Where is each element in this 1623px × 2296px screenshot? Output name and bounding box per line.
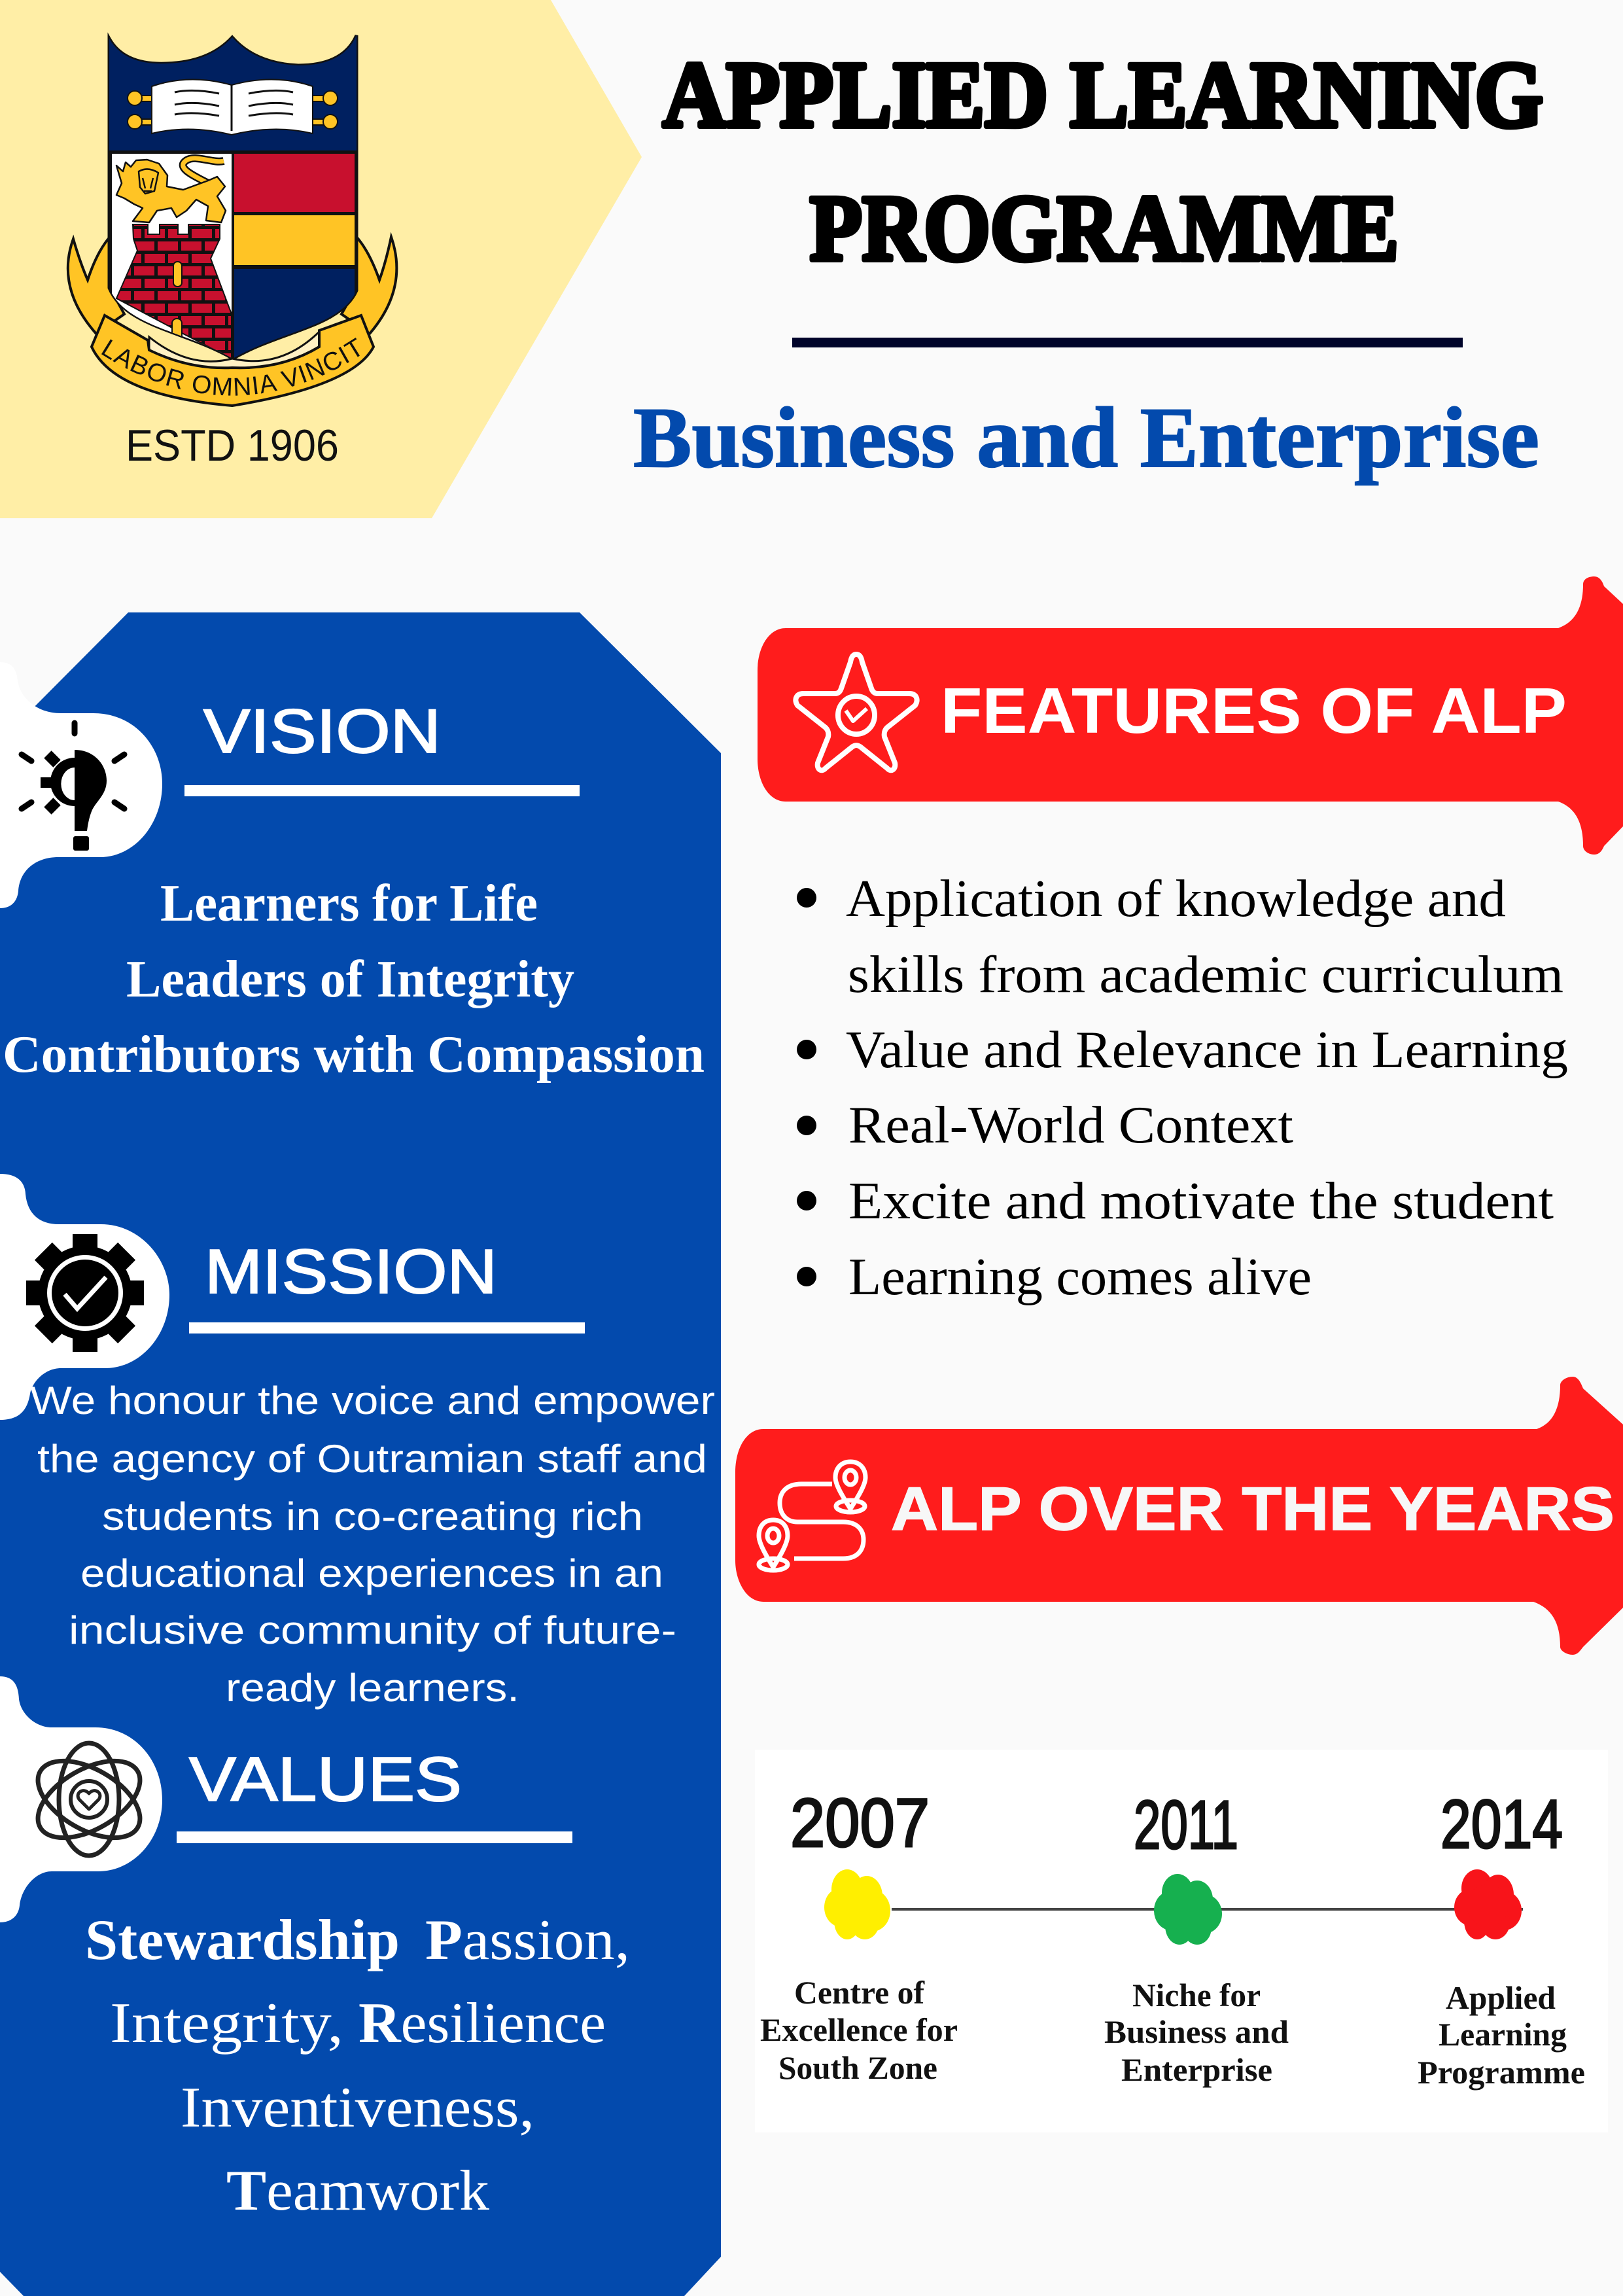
mission statement (30, 1379, 715, 1710)
values list (85, 1909, 630, 2223)
icon: school crest (67, 33, 398, 407)
icon: star with check (795, 654, 917, 770)
caption 2007: Excellence for (760, 2011, 958, 2048)
title: APPLIED LEARNING (663, 43, 1543, 147)
vision section (0, 706, 704, 1083)
caption 2011: Business and (1104, 2013, 1289, 2050)
vision underline (184, 785, 580, 796)
mission statement: students in co-creating rich (102, 1494, 643, 1538)
mission statement: educational experiences in an (80, 1551, 663, 1595)
crest lion (116, 158, 226, 222)
panel: timeline (755, 1750, 1608, 2132)
features list: Value and Relevance in Learning (846, 1021, 1568, 1079)
values list: Stewardship (85, 1909, 400, 1972)
title: PROGRAMME (810, 177, 1399, 281)
values list: Integrity, (110, 1992, 343, 2055)
banner: ALP over the years (735, 1377, 1623, 1655)
values section (0, 1676, 630, 2223)
crest shield (105, 26, 363, 370)
mission section (0, 1174, 715, 1710)
features list: Excite and motivate the student (848, 1173, 1554, 1230)
caption 2007: South Zone (778, 2049, 937, 2086)
features list: Application of knowledge and (846, 870, 1506, 928)
values list: Resilience (358, 1992, 606, 2055)
icon: atom with heart (0, 1676, 162, 1922)
features heading: FEATURES OF ALP (941, 675, 1567, 747)
icon: lightbulb with gear (0, 706, 162, 908)
mission heading: MISSION (205, 1237, 497, 1307)
timeline node 2011 (1104, 1787, 1289, 2088)
timeline node 2007 (760, 1785, 958, 2086)
subtitle: Business and Enterprise (633, 389, 1539, 486)
title divider (792, 338, 1463, 347)
vision heading: VISION (203, 697, 441, 766)
mission underline (189, 1322, 585, 1333)
vision statements (3, 875, 705, 1084)
crest open book (128, 79, 338, 135)
years heading: ALP OVER THE YEARS (891, 1474, 1614, 1543)
caption 2011: Enterprise (1121, 2051, 1272, 2088)
year label 2011: 2011 (1134, 1787, 1238, 1863)
timeline line (892, 1908, 1523, 1911)
logo caption: ESTD 1906 (126, 421, 339, 470)
panel: vision mission values (0, 612, 721, 2296)
crest motto scroll: LABOR OMNIA VINCIT (101, 338, 360, 396)
panel: header logo hexagon (0, 0, 642, 518)
caption 2014 (1418, 1979, 1585, 2091)
caption 2007 (760, 1974, 958, 2086)
caption 2014: Learning (1439, 2016, 1567, 2053)
mission statement: the agency of Outramian staff and (37, 1437, 707, 1481)
caption 2007: Centre of (794, 1974, 925, 2011)
mission statement: ready learners. (226, 1666, 519, 1710)
year label 2014: 2014 (1440, 1786, 1563, 1863)
vision statements: Contributors with Compassion (3, 1026, 705, 1084)
features list: Real-World Context (848, 1097, 1293, 1154)
mission statement: We honour the voice and empower (30, 1379, 715, 1422)
values list: Passion, (425, 1909, 630, 1972)
icon: gear with check (0, 1174, 169, 1420)
features list: Learning comes alive (848, 1248, 1312, 1306)
title (663, 43, 1543, 281)
features list (797, 870, 1568, 1306)
values list: Teamwork (226, 2159, 489, 2223)
caption 2014: Programme (1418, 2054, 1585, 2091)
mission statement: inclusive community of future- (69, 1608, 676, 1652)
banner: features of ALP (758, 576, 1623, 855)
timeline node 2014 (1418, 1786, 1585, 2091)
crest horns (68, 237, 396, 334)
values heading: VALUES (189, 1744, 462, 1814)
features list: skills from academic curriculum (848, 946, 1563, 1004)
caption 2011 (1104, 1977, 1289, 2088)
values list: Inventiveness, (181, 2076, 534, 2140)
vision statements: Learners for Life (160, 875, 538, 932)
values underline (177, 1831, 572, 1843)
icon: route with pins (759, 1462, 865, 1570)
vision statements: Leaders of Integrity (126, 951, 574, 1008)
caption 2014: Applied (1446, 1979, 1556, 2016)
year label 2007: 2007 (790, 1785, 930, 1862)
caption 2011: Niche for (1132, 1977, 1261, 2013)
